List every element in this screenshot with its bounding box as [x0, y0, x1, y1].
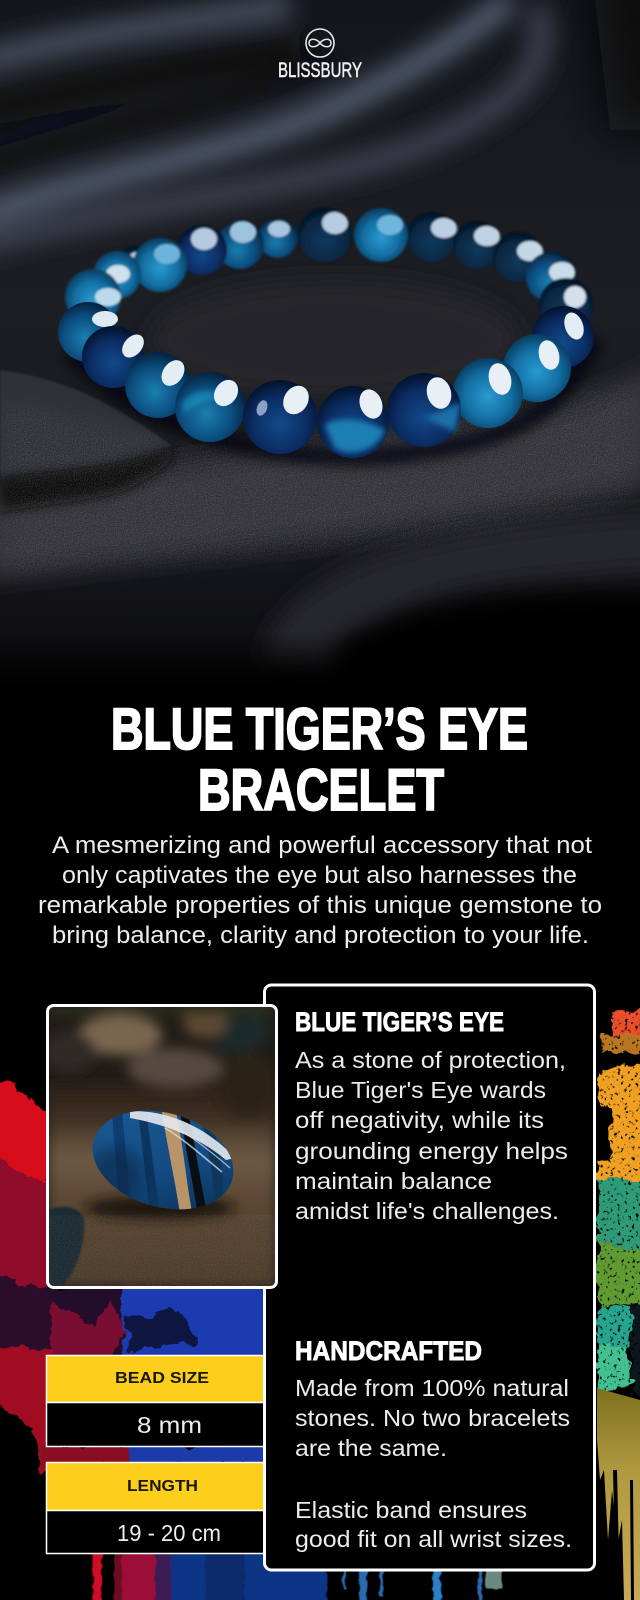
- spec: bead size: [46, 1356, 264, 1446]
- section: Handcrafted: Made from 100% natural: [295, 1375, 569, 1401]
- title: BRACELET: [198, 758, 444, 823]
- section: Blue Tiger's Eye: [295, 1007, 568, 1224]
- intro paragraph: remarkable properties of this unique gemstone to: [38, 892, 602, 919]
- spec: length: LENGTH: [127, 1478, 198, 1495]
- bracelet: front beads: [58, 302, 594, 458]
- lower fabric folds: [0, 368, 640, 662]
- section: Handcrafted: are the same.: [295, 1435, 447, 1461]
- logo: Blissbury infinity mark: BLISSBURY: [278, 59, 362, 82]
- hero photo: bracelet on dark fabric: [0, 0, 640, 700]
- section: Handcrafted: stones. No two bracelets: [295, 1405, 570, 1431]
- section: Handcrafted: [295, 1336, 572, 1552]
- spec: bead size: BEAD SIZE: [115, 1370, 209, 1387]
- polished stone: [92, 1110, 234, 1210]
- section: Blue Tiger's Eye: off negativity, while its: [295, 1107, 544, 1133]
- title: BLUE TIGER’S EYE: [111, 697, 528, 762]
- spec: bead size: 8 mm: [137, 1412, 202, 1438]
- intro paragraph: A mesmerizing and powerful accessory that not: [52, 832, 592, 859]
- intro paragraph: [38, 832, 602, 949]
- paint splash: left red and blue: [0, 1081, 270, 1475]
- paint splash: right orange, green and yellow: [597, 1010, 640, 1600]
- section: Blue Tiger's Eye: BLUE TIGER’S EYE: [295, 1007, 504, 1037]
- spec table: [46, 1356, 264, 1554]
- title: [111, 697, 528, 823]
- thumbnail photo: polished blue tiger's eye stone: [44, 1000, 278, 1288]
- section: Blue Tiger's Eye: amidst life's challenges.: [295, 1198, 559, 1224]
- section: Blue Tiger's Eye: grounding energy helps: [295, 1138, 568, 1164]
- bracelet: back beads: [65, 208, 593, 332]
- spec: length: [46, 1462, 264, 1554]
- bracelet shadow: [70, 340, 595, 457]
- section: Handcrafted: HANDCRAFTED: [295, 1336, 482, 1366]
- section: Blue Tiger's Eye: maintain balance: [295, 1168, 492, 1194]
- intro paragraph: only captivates the eye but also harnesses the: [62, 862, 577, 889]
- section: Handcrafted: good fit on all wrist sizes.: [295, 1526, 572, 1552]
- spec: length: 19 - 20 cm: [117, 1520, 221, 1546]
- section: Blue Tiger's Eye: As a stone of protection,: [295, 1047, 566, 1073]
- section: Handcrafted: Elastic band ensures: [295, 1497, 527, 1523]
- paint splash: bottom drips: [93, 1550, 502, 1600]
- logo: Blissbury infinity mark: [278, 29, 362, 82]
- panel: description: [264, 985, 594, 1570]
- section: Blue Tiger's Eye: Blue Tiger's Eye wards: [295, 1077, 546, 1103]
- small dark stone: [48, 1207, 84, 1286]
- intro paragraph: bring balance, clarity and protection to your life.: [52, 922, 589, 949]
